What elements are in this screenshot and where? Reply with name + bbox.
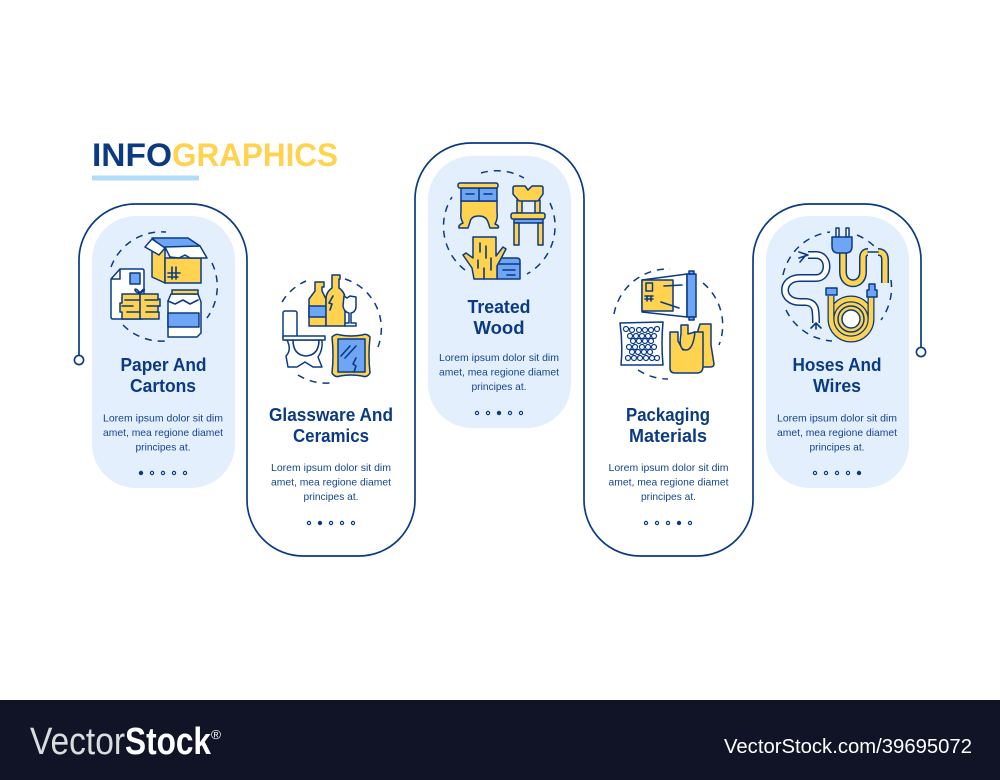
text block: principes at. [641, 491, 696, 503]
icon: hoses and wires [783, 228, 892, 341]
image id: VectorStock.com/39695072 [724, 736, 972, 758]
panel: hoses and wires: Wires [813, 376, 861, 396]
panel: treated wood [439, 171, 559, 415]
text block: principes at. [810, 442, 864, 454]
text block [439, 352, 559, 393]
panel: hoses and wires [777, 228, 897, 475]
text block: principes at. [304, 491, 358, 503]
panel: light backgrounds [92, 156, 909, 488]
text block: Lorem ipsum dolor sit dim [271, 462, 391, 474]
text block [777, 412, 897, 454]
text block: Lorem ipsum dolor sit dim [777, 412, 897, 424]
pagination dots [813, 471, 861, 475]
pagination dots [139, 471, 187, 475]
text block: Lorem ipsum dolor sit dim [608, 462, 729, 474]
text block: amet, mea regione diamet [777, 427, 897, 439]
title: INFO [92, 137, 172, 173]
panel: paper and cartons [103, 232, 223, 475]
heading: Packaging [626, 405, 710, 425]
icon: treated wood [443, 171, 555, 279]
icon: glassware and ceramics [282, 275, 381, 383]
logo: VectorStock: ® [211, 727, 221, 742]
text block [608, 462, 729, 503]
text block: principes at. [472, 381, 526, 393]
panel: glassware and ceramics [269, 275, 393, 525]
text block [271, 462, 391, 503]
panel: packaging materials: Materials [629, 426, 707, 446]
logo: VectorStock: Stock [125, 721, 212, 763]
text block: amet, mea regione diamet [608, 476, 729, 488]
heading: Glassware And [269, 405, 393, 425]
icon: paper and cartons [111, 232, 217, 341]
text block: amet, mea regione diamet [439, 366, 559, 378]
connector outline [74, 143, 926, 556]
heading: Hoses And [792, 355, 882, 375]
pagination dots [307, 521, 355, 525]
text block: Lorem ipsum dolor sit dim [439, 352, 559, 364]
title: GRAPHICS [172, 137, 338, 173]
logo: VectorStock [30, 721, 221, 763]
text block: principes at. [136, 442, 190, 454]
footer bar [0, 700, 1000, 780]
heading: Treated [468, 297, 530, 317]
text block: Lorem ipsum dolor sit dim [103, 412, 223, 424]
pagination dots [644, 521, 692, 525]
text block: amet, mea regione diamet [103, 427, 223, 439]
logo: VectorStock: Vector [30, 721, 125, 763]
panel: treated wood: Wood [474, 318, 524, 338]
pagination dots [475, 411, 523, 415]
panel: packaging materials [608, 269, 729, 525]
panel: paper and cartons: Cartons [130, 376, 196, 396]
heading: Paper And [120, 355, 206, 375]
icon: packaging materials [614, 269, 723, 379]
text block: amet, mea regione diamet [271, 476, 391, 488]
text block [103, 412, 223, 454]
title [92, 137, 338, 180]
panel: glassware and ceramics: Ceramics [293, 426, 369, 446]
